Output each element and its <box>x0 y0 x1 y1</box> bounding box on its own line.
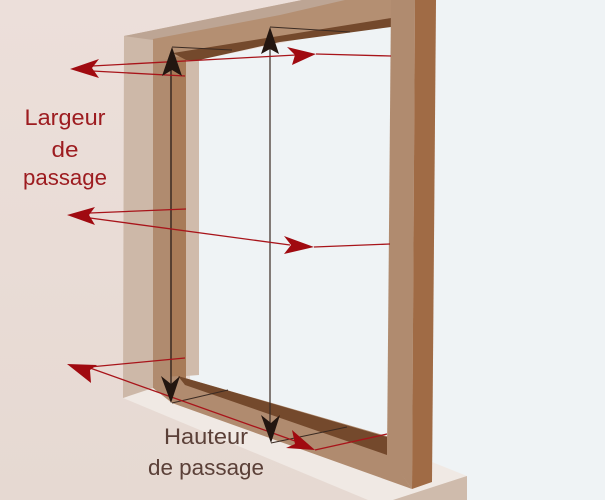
panel: left wall <box>0 0 467 500</box>
label: Hauteur de passage <box>148 424 264 480</box>
window sill <box>123 380 467 500</box>
thin guide lines: height <box>171 27 350 443</box>
arrow: middle right <box>284 236 314 254</box>
arrow: bottom right <box>286 430 315 450</box>
red arrow lines: width <box>90 54 391 450</box>
label: Largeur de passage <box>23 105 107 190</box>
glass pane <box>190 20 392 445</box>
arrow: middle left <box>67 207 95 225</box>
arrow: top left <box>70 59 99 78</box>
label: Largeur de passage: Largeur <box>24 105 106 130</box>
label: Largeur de passage: passage <box>23 165 107 190</box>
window frame <box>123 0 436 489</box>
arrow: top right <box>287 47 316 65</box>
arrow: height left bottom <box>161 376 180 403</box>
arrow: height right bottom <box>261 415 280 443</box>
label: Hauteur de passage: Hauteur <box>164 424 248 449</box>
label: Hauteur de passage: de passage <box>148 455 264 480</box>
label: Largeur de passage: de <box>52 137 78 162</box>
arrow: height right top <box>261 27 279 54</box>
arrow: bottom left <box>67 364 97 383</box>
arrow: height left top <box>162 47 182 76</box>
